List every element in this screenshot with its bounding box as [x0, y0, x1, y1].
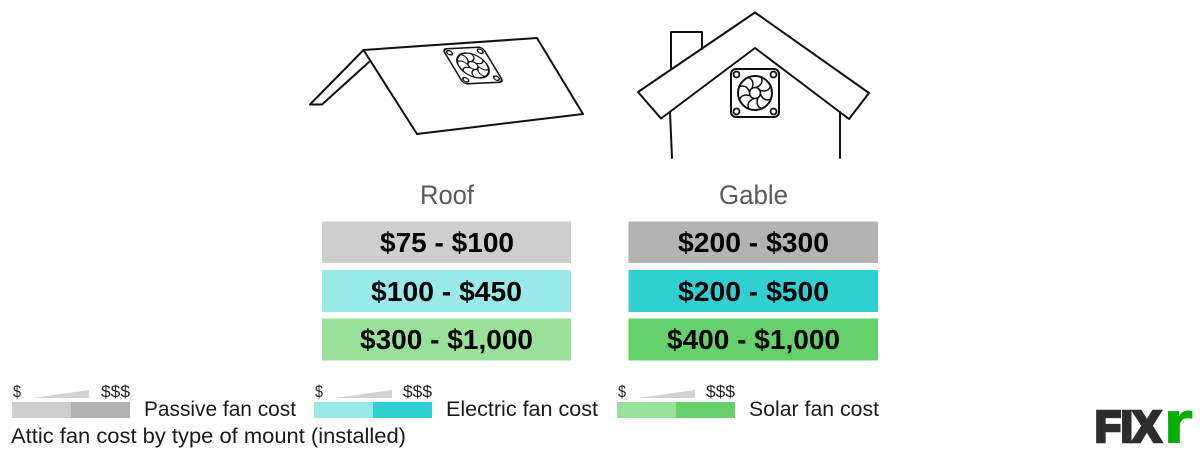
- icon: gable fan: [731, 69, 779, 117]
- logo: Fixr: [1095, 391, 1193, 455]
- legend: passive fan cost: Passive fan cost: [144, 398, 296, 421]
- heading: Roof: Roof: [420, 180, 474, 210]
- legend: solar fan cost: Solar fan cost: [749, 398, 879, 421]
- heading: Gable: Gable: [719, 180, 788, 210]
- legend: passive fan cost: $: [13, 382, 21, 401]
- logo: Fixr: FIX: [1095, 402, 1161, 452]
- price bar: gable passive: $200 - $300: [678, 227, 829, 258]
- legend: electric fan cost: $: [315, 382, 323, 401]
- panel: gable prices: [628, 222, 878, 360]
- price bar: roof passive: $75 - $100: [380, 227, 514, 258]
- price bar: gable solar: $400 - $1,000: [667, 324, 840, 355]
- legend: solar fan cost: $: [618, 382, 626, 401]
- price bar: roof passive: [322, 222, 571, 263]
- price bar: roof electric: $100 - $450: [371, 276, 522, 307]
- price bar: roof solar: $300 - $1,000: [360, 324, 533, 355]
- illustration: roof mount attic fan: [310, 38, 583, 134]
- price bar: gable passive: [628, 222, 878, 263]
- price bar: roof electric: [322, 270, 571, 312]
- legend: solar fan cost: [617, 382, 879, 421]
- legend: electric fan cost: [314, 382, 598, 421]
- panel: roof prices: [322, 222, 571, 360]
- price bar: gable electric: $200 - $500: [678, 276, 829, 307]
- caption: Attic fan cost by type of mount (installed): [11, 425, 406, 448]
- legend: passive fan cost: $$$: [101, 382, 131, 401]
- legend: solar fan cost: $$$: [706, 382, 736, 401]
- illustration: gable mount attic fan: [638, 12, 869, 158]
- icon: roof fan: [443, 47, 503, 84]
- legend: electric fan cost: $$$: [403, 382, 433, 401]
- price bar: gable electric: [628, 270, 878, 312]
- legend: passive fan cost: [12, 382, 296, 421]
- price bar: roof solar: [322, 318, 571, 360]
- price bar: gable solar: [628, 318, 878, 360]
- legend: electric fan cost: Electric fan cost: [446, 398, 598, 421]
- logo: Fixr: r: [1164, 391, 1193, 455]
